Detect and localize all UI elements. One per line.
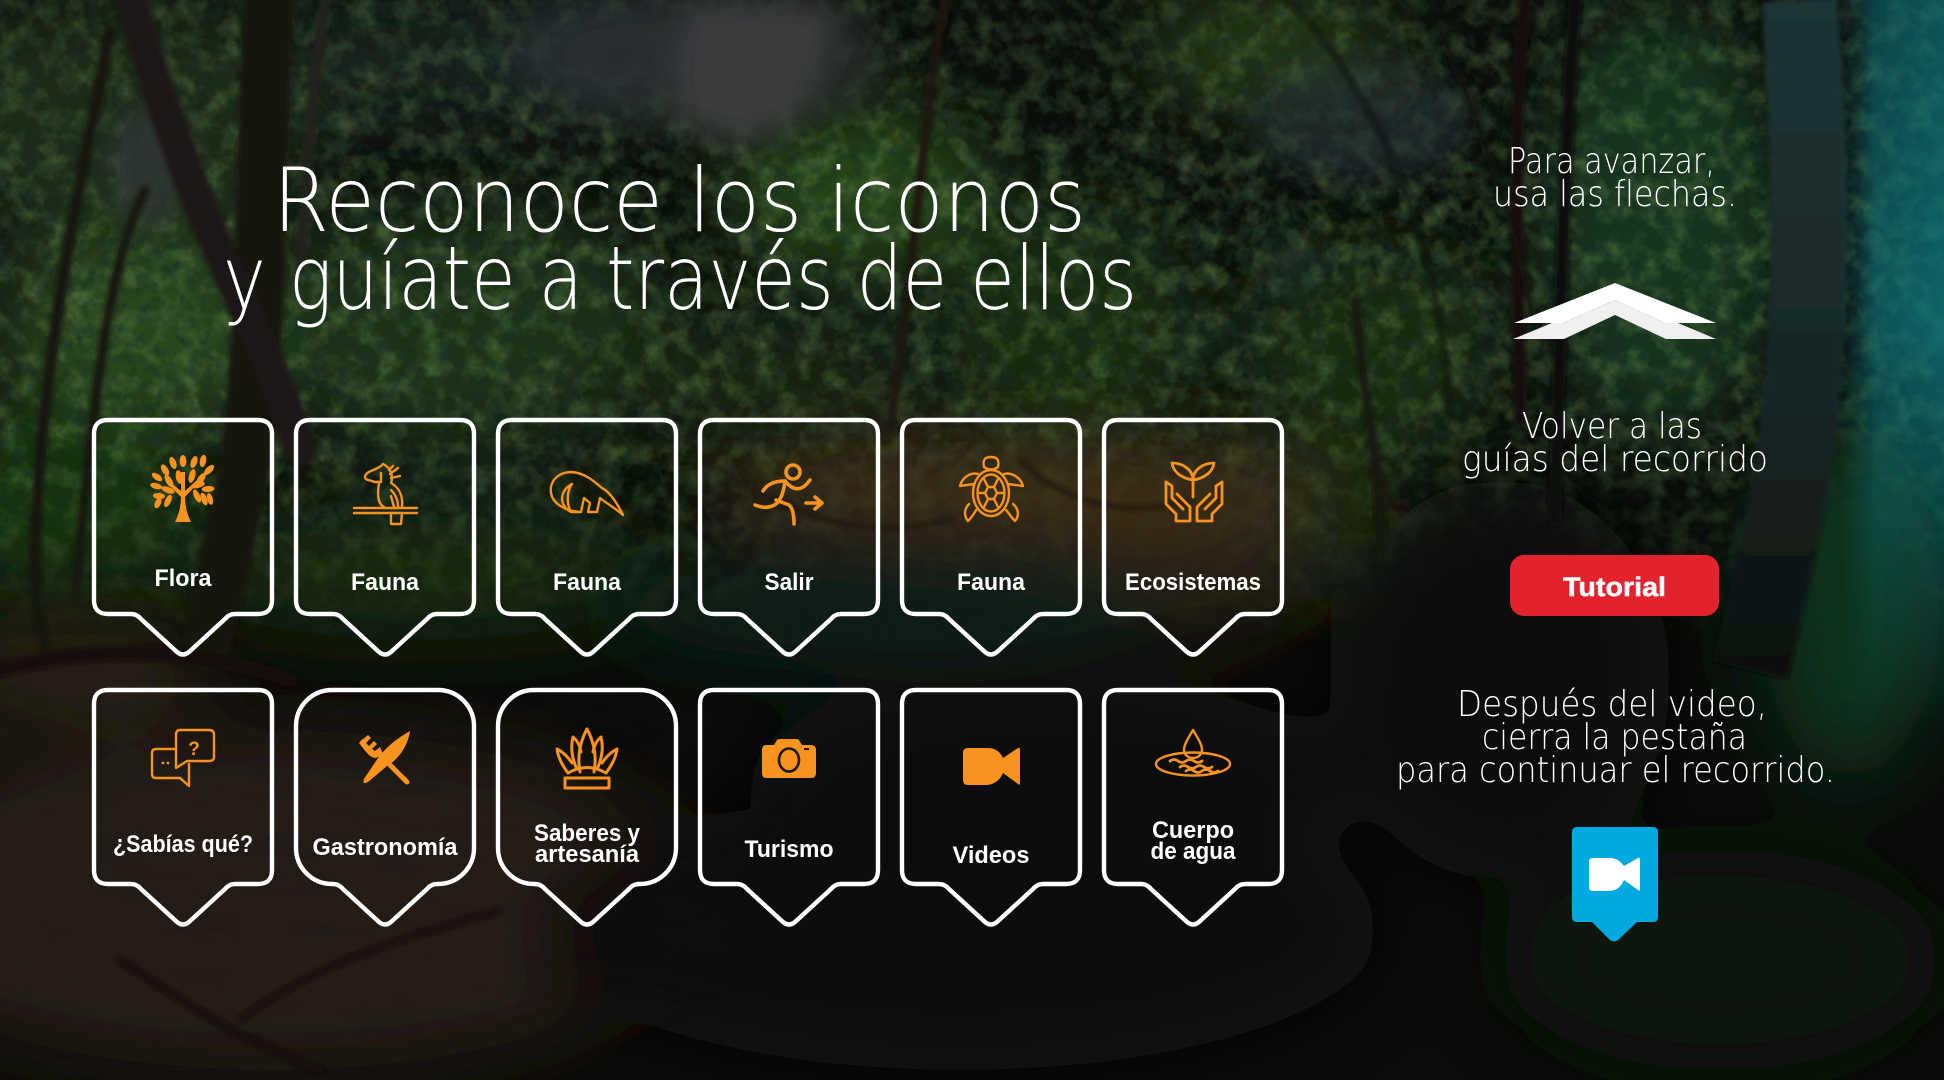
icon: blue video pin	[1572, 827, 1658, 942]
card: Cuerpo de agua	[1104, 690, 1282, 924]
label: artesanía	[535, 841, 640, 868]
text: after video instruction	[1396, 684, 1835, 791]
text: after video instruction: Después del video,	[1457, 684, 1767, 725]
label: Videos	[952, 842, 1030, 869]
title: Reconoce los iconos	[273, 149, 1086, 252]
card: Fauna anteater	[498, 420, 676, 654]
card: Videos	[902, 690, 1080, 924]
label: Ecosistemas	[1125, 569, 1261, 596]
icon: camera	[762, 739, 816, 778]
card: Fauna parrot	[296, 420, 474, 654]
card: Sabías qué	[94, 690, 272, 924]
icon: runner	[755, 465, 822, 524]
text: tour guides instruction: Volver a las	[1522, 406, 1702, 447]
icon: water body	[1156, 730, 1230, 776]
icon: anteater	[551, 472, 623, 515]
label: de agua	[1150, 838, 1236, 865]
label: Gastronomía	[312, 834, 458, 861]
panel: icon guide grid	[94, 420, 1282, 924]
label: ¿Sabías qué?	[113, 831, 253, 858]
label: Fauna	[351, 569, 420, 596]
icon: tree	[149, 454, 216, 522]
text: arrows instruction: usa las flechas.	[1493, 174, 1737, 215]
text: tour guides instruction	[1462, 406, 1768, 480]
icon: parrot	[354, 464, 417, 524]
icon: up chevron arrow	[1513, 283, 1716, 339]
label	[534, 820, 641, 868]
label: Flora	[154, 565, 212, 592]
card: Flora	[94, 420, 272, 654]
icon: chat bubbles: ?	[188, 739, 200, 760]
button: Tutorial: Tutorial	[1563, 572, 1666, 602]
card: Fauna turtle	[902, 420, 1080, 654]
label: Fauna	[553, 569, 622, 596]
icon: video camera	[963, 748, 1020, 785]
icon: fork and knife	[359, 731, 410, 783]
button: Tutorial	[1510, 555, 1719, 616]
card: Turismo	[700, 690, 878, 924]
text: after video instruction: para continuar el recorrido.	[1396, 750, 1835, 791]
label	[1150, 817, 1236, 865]
card: Saberes y artesanía	[498, 690, 676, 924]
text: arrows instruction: Para avanzar,	[1508, 141, 1715, 182]
label: Saberes y	[534, 820, 641, 847]
icon: chat bubbles	[152, 730, 214, 786]
text: after video instruction: cierra la pestaña	[1482, 717, 1747, 758]
title	[223, 149, 1137, 330]
label: Turismo	[744, 836, 834, 863]
icon: hands with sprout	[1166, 463, 1222, 521]
icon: feather crown	[557, 729, 617, 788]
title: y guíate a través de ellos	[223, 227, 1137, 330]
card: Gastronomía	[296, 690, 474, 924]
text: arrows instruction	[1493, 141, 1737, 215]
text: tour guides instruction: guías del recorrido	[1462, 439, 1768, 480]
label: Salir	[764, 569, 814, 596]
icon: turtle	[960, 457, 1023, 521]
card: Salir	[700, 420, 878, 654]
card: Ecosistemas	[1104, 420, 1282, 654]
label: Fauna	[957, 569, 1026, 596]
label: Cuerpo	[1152, 817, 1234, 844]
